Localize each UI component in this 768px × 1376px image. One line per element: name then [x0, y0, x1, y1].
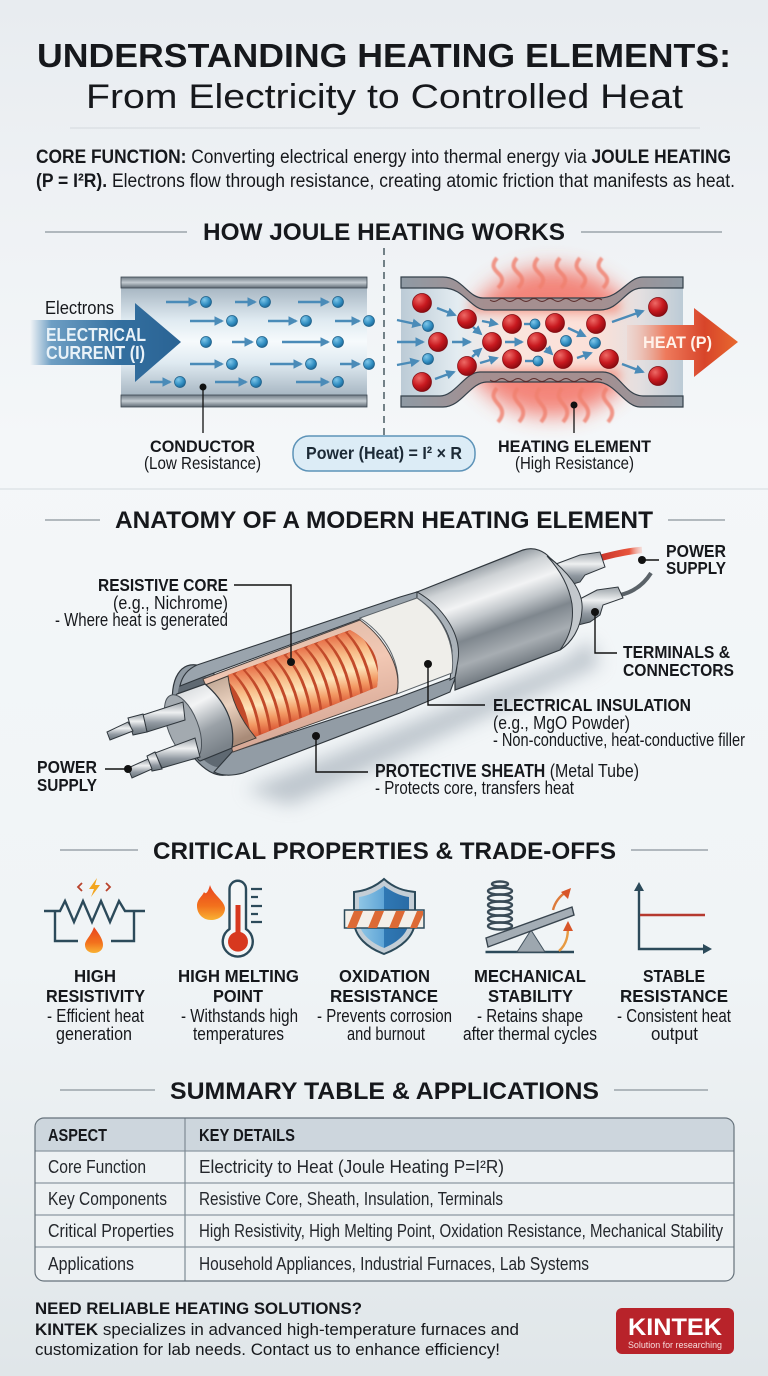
- label: electrical insulation: ELECTRICAL INSULATION: [493, 695, 691, 715]
- property: stable resistance: output: [651, 1024, 698, 1044]
- heading: critical properties: CRITICAL PROPERTIES & TRADE-OFFS: [153, 838, 616, 865]
- heading: anatomy: ANATOMY OF A MODERN HEATING ELEMENT: [115, 507, 653, 534]
- heating element label: (High Resistance): [515, 453, 634, 473]
- logo: KINTEK: KINTEK: [628, 1314, 723, 1341]
- label: terminals: CONNECTORS: [623, 660, 734, 680]
- property: high melting point: HIGH MELTING: [178, 966, 299, 986]
- property: mechanical stability: STABILITY: [488, 986, 573, 1006]
- label: power supply right: POWER: [666, 541, 726, 561]
- formula pill: Power (Heat) = I² × R: [306, 443, 462, 463]
- label: power supply left: POWER: [37, 757, 97, 777]
- table row: key components: [48, 1189, 503, 1209]
- core function text block: CORE FUNCTION: Converting electrical energy into thermal energy via JOULE HEATING: [36, 147, 731, 168]
- electrical current arrow: Electrons: [45, 298, 114, 318]
- tube shadow: [245, 640, 600, 805]
- table row: key components: Resistive Core, Sheath, Insulation, Terminals: [199, 1189, 503, 1209]
- property: oxidation resistance: - Prevents corrosion: [317, 1006, 452, 1026]
- icon: resistor with flame: [44, 878, 145, 953]
- resistive coil: [228, 630, 378, 737]
- property: mechanical stability: [463, 882, 597, 1044]
- property: mechanical stability: MECHANICAL: [474, 966, 586, 986]
- label: power supply left: SUPPLY: [37, 775, 97, 795]
- diagram: joule heating: [30, 248, 738, 473]
- table row: applications: [48, 1254, 589, 1274]
- footer call to action: NEED RELIABLE HEATING SOLUTIONS?: [35, 1299, 362, 1318]
- property: high resistivity: HIGH: [74, 966, 116, 986]
- heat arrow: HEAT (P): [643, 333, 712, 352]
- sheath front ring: [158, 655, 258, 785]
- conductor label: CONDUCTOR: [150, 437, 255, 456]
- heat glow: [464, 268, 640, 416]
- electrical current arrow: CURRENT (I): [46, 343, 145, 363]
- property: high melting point: temperatures: [193, 1024, 284, 1044]
- label: resistive core: - Where heat is generated: [55, 610, 228, 630]
- table row: core function: [48, 1157, 504, 1177]
- label: resistive core: [55, 575, 295, 666]
- core function text block: [36, 147, 735, 192]
- diagram: heating element anatomy: [37, 541, 745, 805]
- label: power supply right: SUPPLY: [666, 558, 726, 578]
- outer sheath: [417, 549, 581, 690]
- label: electrical insulation: (e.g., MgO Powder): [493, 713, 630, 733]
- title: [37, 37, 731, 116]
- property: oxidation resistance: RESISTANCE: [330, 986, 438, 1006]
- conductor tube: [121, 277, 367, 407]
- cut edge ring: [417, 592, 459, 680]
- property: high melting point: [178, 881, 299, 1044]
- icon: shield with barrier: [344, 879, 424, 954]
- logo: KINTEK: [616, 1308, 734, 1354]
- heading: summary: SUMMARY TABLE & APPLICATIONS: [170, 1078, 599, 1105]
- label: protective sheath: PROTECTIVE SHEATH (Metal Tube): [375, 761, 639, 781]
- property: high resistivity: RESISTIVITY: [46, 986, 145, 1006]
- icon: thermometer with flame: [197, 881, 262, 957]
- property: high melting point: - Withstands high: [181, 1006, 298, 1026]
- property: oxidation resistance: and burnout: [347, 1024, 425, 1044]
- electrical current arrow: ELECTRICAL: [46, 325, 146, 345]
- label: protective sheath: [312, 732, 639, 798]
- heater atoms and electrons: [412, 294, 668, 392]
- heater arrows: [397, 308, 643, 379]
- label: resistive core: RESISTIVE CORE: [98, 575, 228, 595]
- heading: how joule heating works: HOW JOULE HEATING WORKS: [203, 219, 565, 246]
- heat waves: [493, 258, 612, 422]
- property: stable resistance: - Consistent heat: [617, 1006, 731, 1026]
- label: protective sheath: - Protects core, transfers heat: [375, 778, 574, 798]
- footer call to action: KINTEK specializes in advanced high-temperature furnaces and: [35, 1320, 519, 1339]
- label: terminals: [591, 608, 734, 680]
- label: electrical insulation: [424, 660, 745, 750]
- property: high resistivity: generation: [56, 1024, 132, 1044]
- heating element label: [498, 402, 652, 473]
- electrical current arrow: [30, 298, 181, 382]
- dashed divider: [383, 248, 385, 436]
- formula pill: [293, 436, 475, 471]
- insulation fill: [360, 598, 453, 694]
- label: resistive core: (e.g., Nichrome): [113, 593, 228, 613]
- footer call to action: [35, 1299, 519, 1359]
- property: mechanical stability: - Retains shape: [477, 1006, 583, 1026]
- right terminals and wires: [556, 550, 651, 625]
- front pins: [107, 702, 200, 778]
- core function text block: (P = I²R). Electrons flow through resistance, creating atomic friction that manifests as heat.: [36, 171, 735, 192]
- conductor label: [144, 384, 261, 473]
- properties row: [44, 878, 731, 1044]
- property: stable resistance: RESISTANCE: [620, 986, 728, 1006]
- lower cut sheath wall: [214, 676, 456, 775]
- label: power supply left: [37, 757, 132, 795]
- table header: ASPECT: [48, 1125, 107, 1145]
- label: power supply right: [638, 541, 726, 578]
- conductor electrons and arrows: [150, 296, 374, 388]
- title: UNDERSTANDING HEATING ELEMENTS:: [37, 37, 731, 74]
- tan core end: [205, 676, 256, 748]
- property: high resistivity: [44, 878, 145, 1044]
- front collar and cap: [157, 684, 233, 764]
- icon: spring and lever: [486, 882, 574, 952]
- property: high melting point: POINT: [213, 986, 263, 1006]
- table row: core function: Core Function: [48, 1157, 146, 1177]
- icon: flat line chart: [634, 882, 712, 954]
- table row: key components: Key Components: [48, 1189, 167, 1209]
- heating element label: HEATING ELEMENT: [498, 437, 652, 456]
- property: mechanical stability: after thermal cycles: [463, 1024, 597, 1044]
- conductor label: (Low Resistance): [144, 453, 261, 473]
- upper cut sheath wall: [180, 592, 417, 686]
- summary table: [35, 1118, 734, 1281]
- table row: critical properties: Critical Properties: [48, 1221, 174, 1241]
- heating element tube: [401, 277, 683, 407]
- footer call to action: customization for lab needs. Contact us to enhance efficiency!: [35, 1340, 500, 1359]
- table row: core function: Electricity to Heat (Joule Heating P=I²R): [199, 1157, 504, 1177]
- property: stable resistance: [617, 882, 731, 1044]
- label: terminals: TERMINALS &: [623, 642, 730, 662]
- property: high resistivity: - Efficient heat: [47, 1006, 144, 1026]
- heat arrow: [627, 308, 738, 377]
- core housing: [203, 620, 398, 752]
- logo: KINTEK: Solution for researching: [628, 1340, 722, 1350]
- property: stable resistance: STABLE: [643, 966, 705, 986]
- end flange: [547, 556, 582, 650]
- property: oxidation resistance: [317, 879, 452, 1044]
- table row: applications: Household Appliances, Industrial Furnaces, Lab Systems: [199, 1254, 589, 1274]
- table header: [48, 1125, 295, 1145]
- property: oxidation resistance: OXIDATION: [339, 966, 430, 986]
- table row: applications: Applications: [48, 1254, 134, 1274]
- table header: KEY DETAILS: [199, 1125, 295, 1145]
- title: From Electricity to Controlled Heat: [86, 78, 684, 116]
